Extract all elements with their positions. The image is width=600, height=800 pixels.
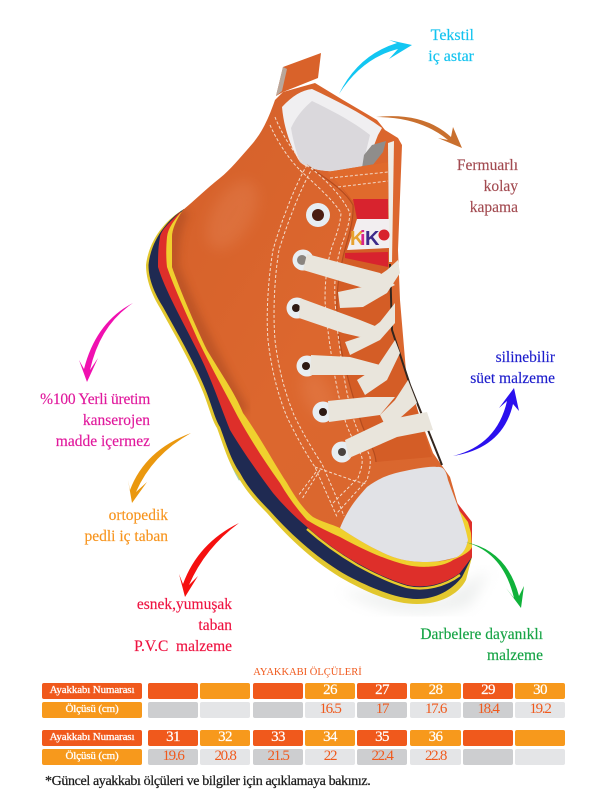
stitching — [267, 117, 370, 517]
teal sole reflection — [212, 405, 240, 480]
red sole band — [158, 212, 472, 586]
callout: darbelere dayanıklı: malzeme — [487, 647, 543, 664]
row: ölçü 1: 17 — [376, 701, 388, 717]
callout: yerli üretim — [40, 391, 150, 450]
row: ölçü 1: 17.6 — [425, 701, 446, 717]
callout: silinebilir süet malzeme: silinebilir — [496, 349, 555, 366]
row: ölçü 1: 19.2 — [529, 701, 551, 717]
yellow sole band — [166, 210, 472, 567]
row: numara 1: 27 — [375, 682, 389, 698]
laces — [299, 254, 433, 458]
callout: darbelere dayanıklı: Darbelere dayanıklı — [420, 626, 543, 643]
thin yellow sole line — [307, 529, 460, 588]
shoe — [146, 53, 472, 604]
brand label — [345, 199, 390, 267]
footnote: *Güncel ayakkabı ölçüleri ve bilgiler için açıklamaya bakınız. — [45, 774, 370, 789]
row: numara 1: 30 — [533, 682, 547, 698]
row: ölçü 1: 16.5 — [319, 701, 341, 717]
row: numara 1: 29 — [481, 682, 495, 698]
leather upper — [172, 83, 468, 562]
row: ölçü 2: 21.5 — [267, 748, 289, 764]
row: ölçü 2: 22 — [324, 748, 336, 764]
row: numara 2: 36 — [429, 729, 442, 745]
row: ölçü 2: 22.4 — [371, 748, 393, 764]
callout: silinebilir süet malzeme — [470, 349, 555, 387]
callout: fermuarlı kolay kapama: kapama — [470, 199, 518, 216]
row: ölçü 2: 19.6 — [162, 748, 184, 764]
arrow: fermuar, brown — [376, 116, 462, 148]
eyelets — [286, 203, 352, 462]
callout: tekstil iç astar: Tekstil — [431, 27, 474, 44]
zipper white fabric — [388, 141, 394, 262]
callout: yerli üretim: madde içermez — [56, 433, 150, 450]
brand label: i — [360, 228, 366, 250]
row: ölçü 1: 18.4 — [477, 701, 499, 717]
row: numara 1: Ayakkabı Numarası — [50, 684, 134, 696]
callout: fermuarlı kolay kapama — [457, 157, 518, 216]
heel tab — [276, 53, 321, 96]
callout: ortopedik: ortopedik — [109, 507, 168, 524]
callout: tekstil iç astar — [428, 27, 474, 65]
row: numara 2: 31 — [166, 729, 180, 745]
toe cap — [340, 467, 468, 562]
row: ölçü 1: Ölçüsü (cm) — [65, 703, 119, 715]
callout: esnek yumuşak taban: taban — [198, 617, 232, 634]
brand label: K — [350, 228, 365, 250]
edge shading — [172, 210, 243, 413]
arrow: darbe, green — [465, 542, 524, 608]
collar panel — [327, 162, 388, 200]
tongue panel — [327, 162, 432, 462]
arrow: süet, blue — [453, 388, 519, 456]
row: numara 2: 33 — [271, 729, 285, 745]
ground shadow — [340, 570, 490, 612]
shoe and arrows illustration — [79, 40, 524, 614]
row: numara 2: Ayakkabı Numarası — [50, 731, 134, 743]
row: numara 1: 28 — [429, 682, 442, 698]
row: numara 1: 26 — [323, 682, 337, 698]
callout: esnek yumuşak taban: esnek,yumuşak — [137, 596, 232, 613]
callout: esnek yumuşak taban — [134, 596, 232, 655]
callout: fermuarlı kolay kapama: kolay — [484, 178, 518, 195]
row: ölçü 2: 22.8 — [425, 748, 446, 764]
callout: yerli üretim: kanserojen — [83, 412, 150, 429]
arrow: esnek taban, red — [179, 523, 239, 597]
callout: esnek yumuşak taban: P.V.C malzeme — [134, 638, 232, 655]
row: numara 2: 35 — [375, 729, 389, 745]
navy sole band — [148, 209, 472, 599]
callout: silinebilir süet malzeme: süet malzeme — [470, 370, 555, 387]
callout: ortopedik: pedli iç taban — [84, 528, 168, 545]
inner lining — [282, 89, 382, 171]
row: numara 2: 34 — [323, 729, 337, 745]
outer sole yellow edge — [146, 209, 472, 604]
callout: fermuarlı kolay kapama: Fermuarlı — [457, 157, 518, 174]
row: ölçü 2: 20.8 — [214, 748, 236, 764]
leather highlights — [196, 172, 342, 424]
row: numara 2: 32 — [218, 729, 232, 745]
arrow: yerli, magenta — [79, 303, 133, 382]
callout: tekstil iç astar: iç astar — [428, 48, 474, 65]
table title: AYAKKABI ÖLÇÜLERİ — [253, 667, 362, 678]
zipper pull — [362, 141, 386, 168]
flap edge shadow — [307, 165, 376, 462]
callout: ortopedik — [84, 507, 168, 545]
row: ölçü 2: Ölçüsü (cm) — [65, 750, 119, 762]
callout: yerli üretim: %100 Yerli üretim — [40, 391, 150, 408]
dark tongue edge — [390, 264, 442, 465]
arrow: tekstil, cyan — [339, 40, 412, 94]
arrow: ortopedik, orange — [128, 433, 191, 503]
brand label: K — [365, 228, 380, 250]
callout: darbelere dayanıklı — [420, 626, 543, 664]
